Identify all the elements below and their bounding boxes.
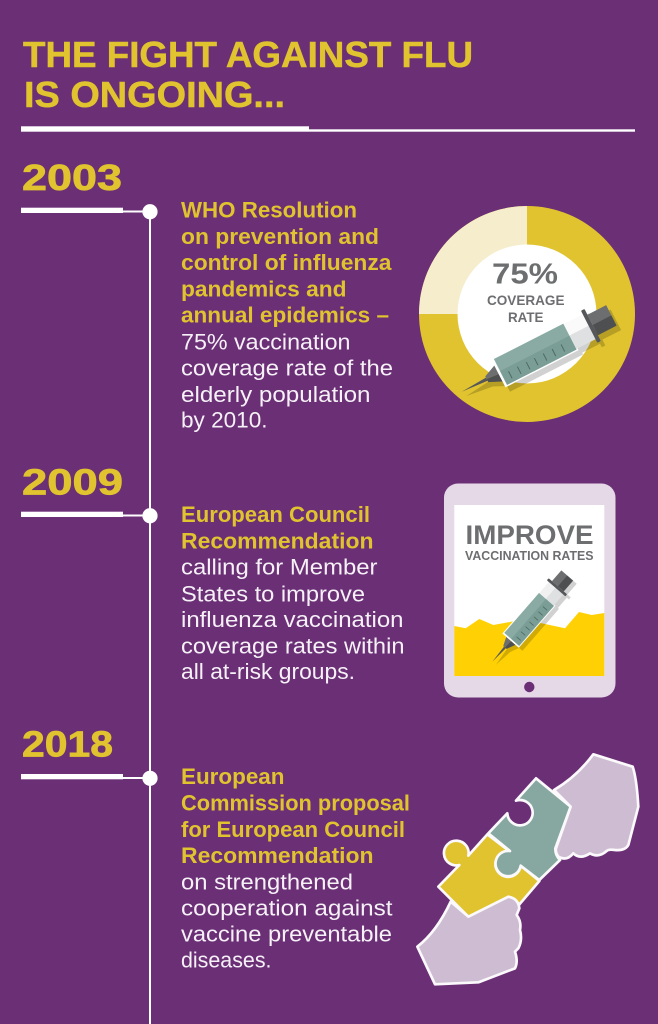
icon: syringe: [483, 567, 580, 673]
puzzle piece: yellow: [438, 834, 539, 917]
year 2003: 2003: [22, 157, 122, 198]
hand: upper right: [554, 754, 638, 859]
text block 2003: on prevention and: [181, 224, 379, 249]
marker 2009: [21, 508, 158, 523]
tablet headline: IMPROVE: [466, 520, 594, 550]
text block 2009: influenza vaccination: [181, 607, 404, 632]
text block 2003: pandemics and: [181, 277, 346, 302]
timeline entry: 2018: [21, 724, 410, 973]
text block 2003: control of influenza: [181, 250, 392, 275]
year 2009: 2009: [22, 461, 123, 502]
text block 2003: coverage rate of the: [181, 355, 393, 380]
text block 2018: European: [181, 764, 284, 789]
text block 2009: [181, 502, 404, 684]
icon: syringe: [454, 298, 624, 413]
text block 2018: cooperation against: [181, 896, 392, 921]
text block 2018: [181, 764, 410, 973]
text block 2009: States to improve: [181, 581, 365, 606]
tablet illustration: [444, 484, 616, 698]
text block 2009: coverage rates within: [181, 633, 404, 658]
marker 2018: [21, 771, 158, 786]
hand: lower left: [417, 897, 521, 984]
text block 2009: all at-risk groups.: [181, 659, 355, 684]
text block 2003: 75% vaccination: [181, 329, 350, 354]
title: THE FIGHT AGAINST FLU: [23, 34, 473, 75]
title: [23, 34, 473, 115]
text block 2018: for European Council: [181, 817, 405, 842]
text block 2003: WHO Resolution: [181, 198, 357, 223]
timeline entry: 2003: [21, 157, 393, 433]
title: IS ONGOING...: [24, 74, 285, 115]
marker 2003: [21, 204, 158, 219]
year 2018: 2018: [22, 724, 113, 765]
donut label: [487, 258, 564, 325]
text block 2018: Commission proposal: [181, 791, 410, 816]
text block 2018: diseases.: [181, 948, 272, 973]
puzzle piece: teal: [488, 778, 571, 880]
text block 2003: annual epidemics –: [181, 303, 389, 328]
donut label: 75%: [492, 258, 558, 290]
title rule: [21, 126, 635, 132]
timeline axis: [149, 211, 151, 1024]
tablet headline: [465, 520, 594, 563]
text block 2018: on strengthened: [181, 869, 353, 894]
text block 2003: [181, 198, 393, 433]
donut label: COVERAGE: [487, 292, 564, 308]
donut label: RATE: [508, 309, 544, 325]
text block 2003: by 2010.: [181, 408, 268, 433]
text block 2009: Recommendation: [181, 529, 374, 554]
text block 2003: elderly population: [181, 382, 370, 407]
timeline entry: 2009: [21, 461, 404, 684]
text block 2009: European Council: [181, 502, 370, 527]
text block 2009: calling for Member: [181, 555, 378, 580]
text block 2018: vaccine preventable: [181, 922, 392, 947]
donut chart: 75% coverage rate: [419, 206, 635, 422]
tablet headline: VACCINATION RATES: [465, 549, 594, 563]
text block 2018: Recommendation: [181, 843, 374, 868]
icon: hands joining puzzle pieces: [417, 754, 638, 984]
